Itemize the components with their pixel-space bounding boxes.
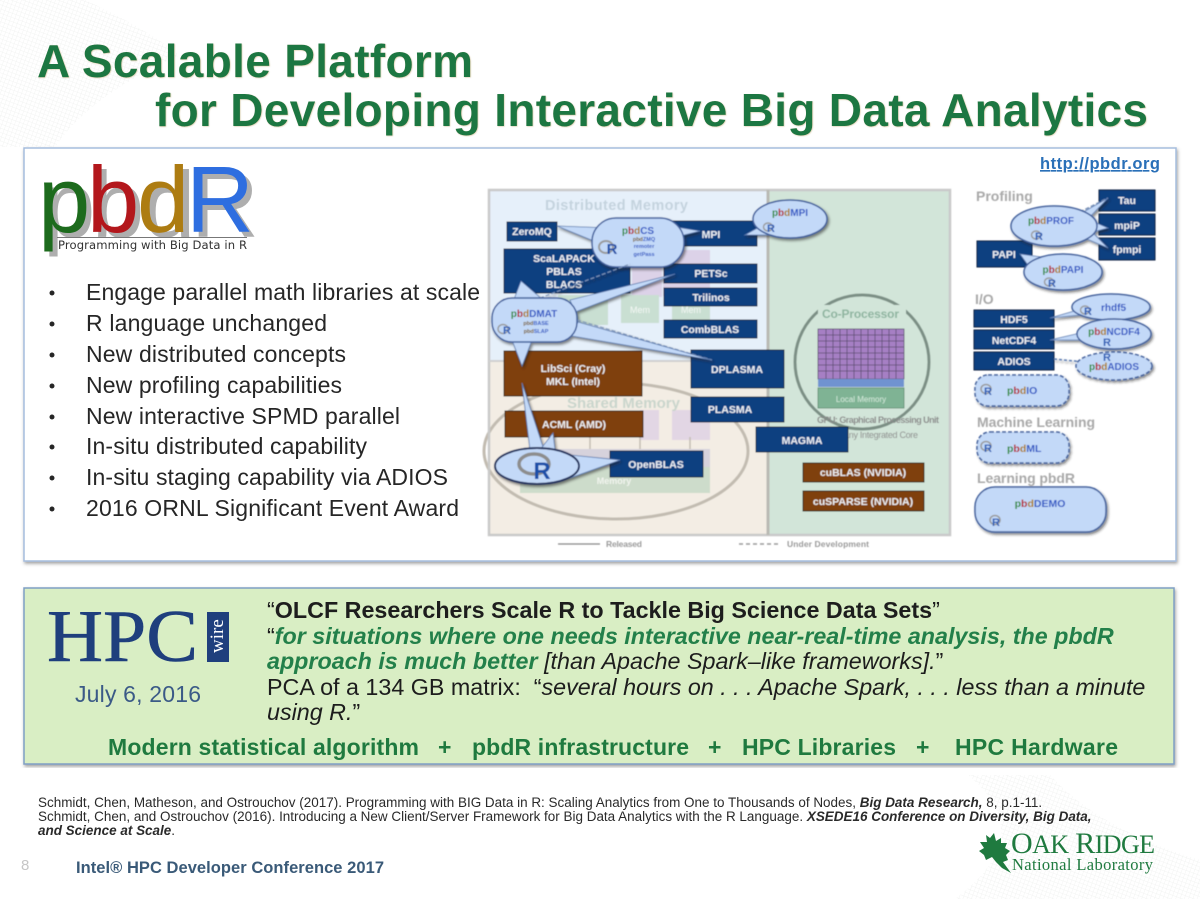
region: distributed memory: Distributed Memory (545, 198, 688, 214)
box: fpmpi (1099, 238, 1155, 260)
legend (558, 539, 869, 549)
region: shared memory (484, 361, 768, 535)
logo: HPCwire: wire (207, 619, 228, 653)
bubble: rhdf5 (1050, 294, 1150, 320)
label: Profiling: Profiling (976, 188, 1033, 204)
bubble: pbdIO (975, 375, 1069, 406)
box: Trilinos: Trilinos (692, 292, 730, 304)
quote text: using R.” (267, 699, 360, 725)
bullet list: In-situ distributed capability (86, 433, 368, 459)
bubble: pbdPAPI: R (1048, 278, 1056, 290)
bubble: rhdf5: R (1084, 306, 1092, 318)
box: ACML: ACML (AMD) (542, 419, 606, 431)
quote text: approach is much better [than Apache Spark–like frameworks].” (267, 648, 943, 674)
box: DPLASMA: DPLASMA (711, 364, 763, 376)
box: LibSci and MKL: LibSci (Cray) (541, 363, 605, 375)
bullet list: New profiling capabilities (86, 372, 342, 398)
references (38, 795, 1092, 838)
box: ScaLAPACK: ScaLAPACK (533, 253, 595, 265)
formula line: + (916, 734, 929, 760)
logo: pbdR: d (143, 152, 195, 257)
bubble: pbdCS: getPass (633, 252, 655, 258)
box: Trilinos (664, 288, 757, 306)
references: and Science at Scale. (38, 823, 175, 838)
bubble: pbdML: pbdML (1007, 443, 1042, 455)
logo: pbdR: b (92, 152, 144, 257)
bubble: pbdNCDF4 (1050, 319, 1151, 349)
box: ADIOS: ADIOS (997, 356, 1031, 368)
date: July 6, 2016 (75, 681, 201, 707)
label: Machine Learning: Machine Learning (977, 414, 1095, 430)
box: ADIOS (974, 352, 1054, 370)
box: HDF5 (974, 310, 1054, 327)
logo: pbdR (38, 147, 259, 257)
box: CombBLAS: CombBLAS (681, 324, 739, 336)
formula line: HPC Hardware (955, 734, 1118, 760)
bubble: pbdMPI: R (767, 223, 775, 235)
bubble: R (495, 383, 620, 485)
box: PAPI: PAPI (992, 249, 1016, 261)
bullet list: New distributed concepts (86, 341, 346, 367)
formula line: pbdR infrastructure (472, 734, 689, 760)
bullet list: 2016 ORNL Significant Event Award (86, 495, 459, 521)
bubble: pbdDEMO: pbdDEMO (1015, 498, 1065, 510)
box: LibSci and MKL (504, 351, 642, 396)
box: cuSPARSE (803, 491, 924, 511)
region: distributed memory: Mem (630, 305, 650, 315)
box: PETSc: PETSc (694, 268, 728, 280)
bullet list: New interactive SPMD parallel (86, 403, 400, 429)
box: Tau (1099, 190, 1155, 211)
box: ScaLAPACK: BLACS (546, 279, 582, 291)
logo: Oak Ridge National Laboratory: OAK RIDGE (1011, 827, 1155, 860)
box: NetCDF4 (974, 330, 1054, 349)
box: mpiP (1099, 214, 1155, 235)
bubble: pbdDMAT: R (503, 325, 511, 337)
box: OpenBLAS: OpenBLAS (628, 459, 684, 471)
box: ScaLAPACK: PBLAS (546, 266, 582, 278)
bubble: pbdPAPI: pbdPAPI (1043, 265, 1084, 276)
page number: 8 (21, 857, 29, 874)
box: PAPI (977, 241, 1032, 267)
bubble: pbdDMAT: pbdSLAP (524, 329, 549, 335)
bubble: pbdCS: pbdCS (622, 226, 654, 237)
bullet list: R language unchanged (86, 310, 327, 336)
region: shared memory: Shared Memory (567, 395, 681, 412)
bullet list: Engage parallel math libraries at scale (86, 279, 480, 305)
bubble: pbdPROF (1011, 198, 1108, 248)
region: distributed memory (489, 190, 768, 361)
formula line: Modern statistical algorithm (108, 734, 419, 760)
region: co-processor: MIC: Many Integrated Core (817, 430, 918, 440)
bubble: pbdNCDF4: pbdNCDF4 (1088, 327, 1140, 338)
bubble: pbdIO: R (984, 386, 992, 398)
bubble: pbdPROF: pbdPROF (1028, 216, 1074, 227)
title: A Scalable Platform (37, 35, 473, 87)
box: MAGMA: MAGMA (782, 435, 823, 447)
bubble: pbdDMAT: pbdBASE (523, 321, 549, 327)
panel: pbdR overview (24, 147, 1176, 561)
box: mpiP: mpiP (1114, 220, 1140, 232)
logo: pbdR: R (186, 147, 254, 252)
bubble: pbdADIOS: R (1103, 352, 1111, 364)
bubble: pbdDMAT: pbdDMAT (511, 309, 557, 320)
box: PETSc (664, 264, 757, 283)
logo: pbdR: R (191, 152, 259, 257)
bubble: pbdIO: pbdIO (1007, 385, 1037, 397)
bullet list (50, 279, 480, 521)
bubble: pbdMPI: pbdMPI (772, 208, 808, 219)
bubble: pbdADIOS (1054, 352, 1152, 380)
formula line: + (708, 734, 721, 760)
logo: Oak Ridge National Laboratory: National Laboratory (1012, 855, 1154, 874)
bubble: R: R (533, 458, 551, 485)
bubble: pbdML: R (984, 443, 992, 455)
bubble: pbdADIOS: pbdADIOS (1089, 362, 1139, 373)
region: co-processor: Co-Processor (822, 307, 899, 321)
bullet list: In-situ staging capability via ADIOS (86, 464, 448, 490)
box: fpmpi: fpmpi (1113, 244, 1141, 256)
box: Tau: Tau (1118, 195, 1136, 207)
region: shared memory: Memory (597, 476, 631, 486)
box: ZeroMQ (507, 222, 557, 241)
label: Learning pbdR: Learning pbdR (977, 470, 1075, 486)
box: ScaLAPACK (504, 249, 630, 293)
logo: pbdR: p (38, 147, 90, 252)
box: cuSPARSE: cuSPARSE (NVIDIA) (813, 496, 913, 508)
panel: HPCwire quote (24, 588, 1174, 764)
formula line (108, 734, 1118, 760)
box: ZeroMQ: ZeroMQ (512, 226, 552, 238)
logo: pbdR: d (137, 147, 189, 252)
chart: software stack diagram (484, 188, 1155, 549)
box: PLASMA: PLASMA (708, 404, 753, 416)
formula line: HPC Libraries (742, 734, 896, 760)
bubble: pbdPROF: R (1035, 231, 1043, 243)
bubble: pbdDEMO: R (992, 517, 1000, 529)
region: co-processor: Local Memory (836, 395, 886, 404)
title: for Developing Interactive Big Data Analytics (155, 84, 1148, 136)
quote text: “for situations where one needs interactive near-real-time analysis, the pbdR (267, 623, 1114, 649)
legend: Released (606, 539, 642, 549)
box: ACML (505, 411, 643, 437)
bubble: pbdNCDF4: R (1103, 337, 1111, 349)
box: OpenBLAS (610, 451, 703, 477)
logo: pbdR: b (87, 147, 139, 252)
formula line: + (438, 734, 451, 760)
box: CombBLAS (664, 320, 757, 338)
logo: pbdR: Programming with Big Data in R (58, 238, 247, 252)
label: I/O: I/O (975, 291, 994, 307)
bubble: pbdML (977, 432, 1069, 463)
bubble: pbdCS (557, 218, 700, 267)
icon: oak leaf (979, 833, 1011, 873)
references: Schmidt, Chen, and Ostrouchov (2016). Introducing a New Client/Server Framework for Big Data Analytics with the R Language. XSEDE16 Conference on Diversity, Big Data, (38, 809, 1092, 824)
logo: pbdR: p (43, 152, 95, 257)
box: LibSci and MKL: MKL (Intel) (546, 376, 600, 388)
bubble: pbdDMAT (492, 264, 712, 366)
quote text: PCA of a 134 GB matrix: “several hours on . . . Apache Spark, . . . less than a minute (267, 674, 1145, 700)
bubble: pbdDEMO (975, 487, 1106, 532)
box: cuBLAS: cuBLAS (NVIDIA) (820, 467, 906, 479)
legend: Under Development (787, 539, 869, 549)
link: pbdr.org: http://pbdr.org (1040, 155, 1160, 173)
references: Schmidt, Chen, Matheson, and Ostrouchov (2017). Programming with BIG Data in R: Scaling Analytics from One to Thousands of Nodes, Big Data Research, 8, p.1-11. (38, 795, 1042, 810)
region: distributed memory: Mem (681, 305, 701, 315)
box: cuBLAS (803, 463, 924, 482)
box: MPI: MPI (702, 229, 720, 241)
region: co-processor (768, 190, 950, 535)
bubble: rhdf5: rhdf5 (1101, 303, 1126, 314)
footer: conference name: Intel® HPC Developer Conference 2017 (76, 859, 384, 877)
region: co-processor: GPU: Graphical Processing Unit (817, 415, 939, 425)
logo: Oak Ridge National Laboratory (979, 827, 1155, 874)
bubble: pbdMPI (745, 200, 827, 238)
box: NetCDF4: NetCDF4 (992, 335, 1036, 347)
box: DPLASMA (691, 350, 784, 388)
box: MPI (670, 221, 757, 246)
box: HDF5: HDF5 (1000, 314, 1028, 326)
bubble: pbdCS: pbdZMQ (633, 237, 656, 243)
bubble: pbdPAPI (1020, 254, 1102, 290)
bubble: pbdCS: remoter (634, 244, 655, 250)
quote text: “OLCF Researchers Scale R to Tackle Big Science Data Sets” (267, 597, 940, 623)
box: MAGMA (756, 427, 848, 452)
quote text (267, 597, 1145, 725)
logo: HPCwire: HPC (47, 596, 198, 678)
title (37, 35, 1148, 136)
bubble: pbdCS: R (607, 241, 618, 258)
box: PLASMA (691, 397, 784, 422)
